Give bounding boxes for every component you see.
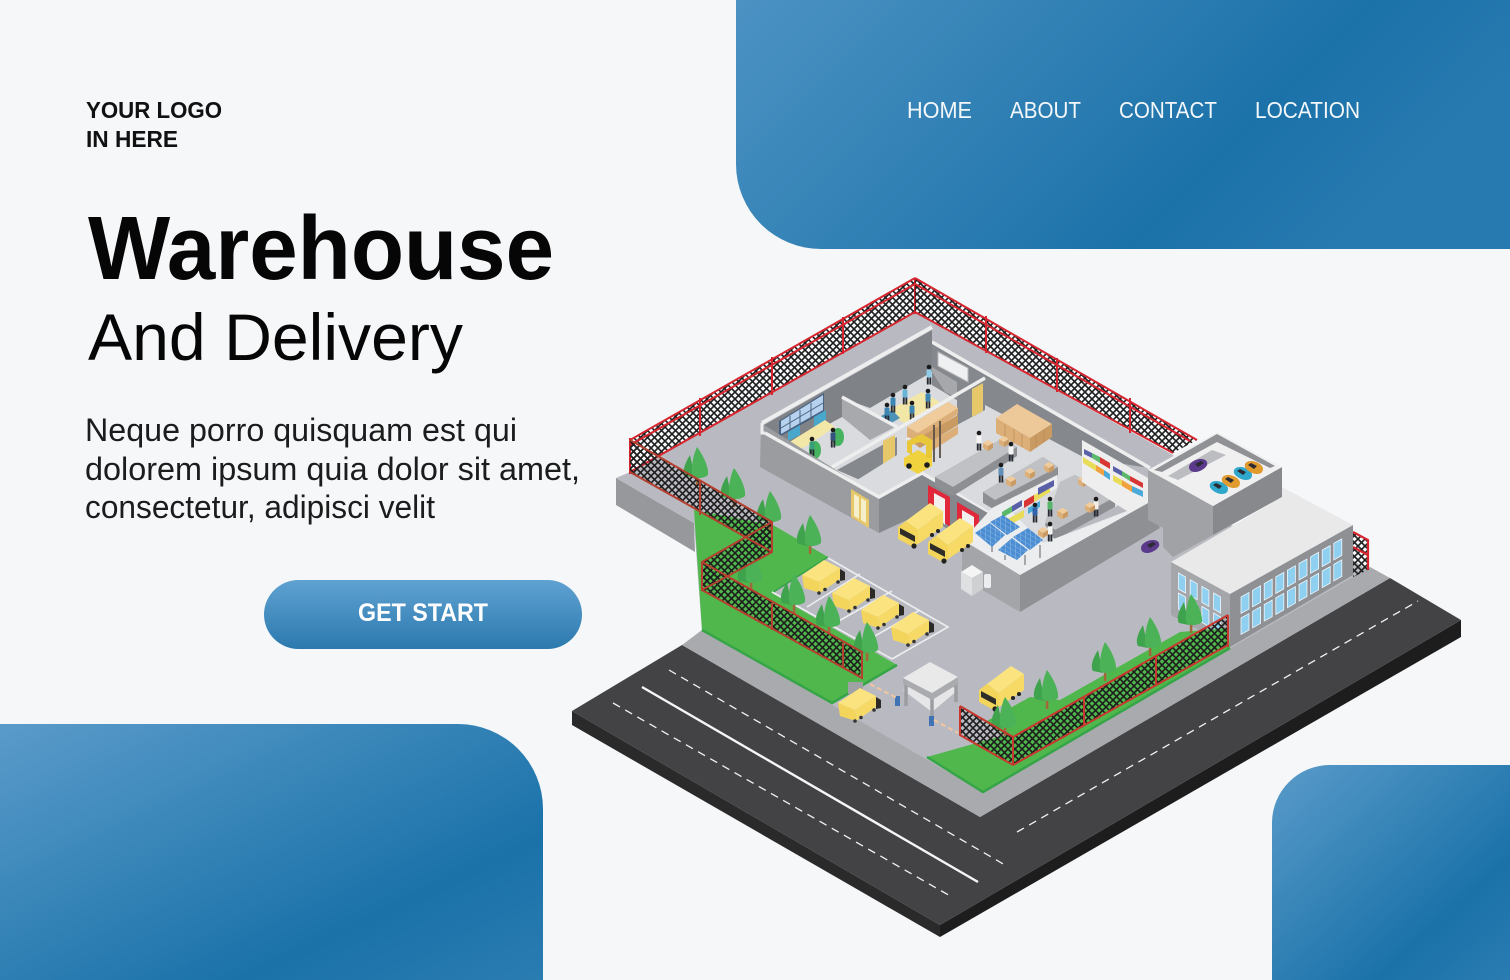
- room divider wall: [842, 397, 897, 440]
- shelf panel back right: [1082, 440, 1148, 513]
- navigation menu: [907, 97, 1360, 123]
- body paragraph: Neque porro quisquam est qui: [85, 412, 517, 448]
- office building: [1171, 487, 1353, 647]
- navigation menu: CONTACT: [1119, 97, 1217, 123]
- office back wall: [762, 327, 932, 445]
- solar panels: [975, 515, 1043, 565]
- hall floor: [857, 455, 922, 497]
- back right wall: [932, 342, 1150, 468]
- fence: back left: [630, 278, 915, 474]
- control room monitors: [779, 393, 835, 450]
- ledge and lot surface: [616, 312, 1390, 817]
- body paragraph: consectetur, adipisci velit: [85, 489, 435, 525]
- title: And Delivery: [88, 300, 463, 374]
- navigation menu: LOCATION: [1255, 97, 1360, 123]
- logo text: YOUR LOGO: [86, 97, 222, 123]
- office door cream: [851, 489, 869, 528]
- grass bank left: [694, 510, 897, 703]
- van at gate: [838, 688, 881, 723]
- air conditioning units: [961, 565, 991, 596]
- yellow trucks at dock: [898, 503, 973, 564]
- gate canopy: [903, 662, 958, 720]
- front walls of lower block: [962, 503, 1160, 612]
- purple car: [1141, 540, 1159, 553]
- logo text: IN HERE: [86, 126, 178, 152]
- meeting table and staff: [881, 385, 940, 425]
- forklift: [904, 421, 940, 474]
- stacked cartons: [996, 404, 1052, 452]
- whiteboard and presenter: [926, 352, 968, 384]
- grass bank right: [927, 628, 1230, 792]
- fence: far right behind building: [1353, 532, 1368, 577]
- white deck with shelves: [963, 475, 1148, 575]
- office front wall: [760, 423, 1000, 533]
- title: Warehouse: [88, 199, 554, 299]
- trees upper row: [684, 447, 821, 554]
- parking block: [1148, 432, 1282, 557]
- navigation menu: ABOUT: [1010, 97, 1081, 123]
- building windows: [1178, 539, 1342, 634]
- title: [88, 199, 554, 374]
- long corridor wall: [832, 378, 985, 480]
- logo text: [86, 97, 222, 152]
- panel: top right blue shape: [736, 0, 1510, 249]
- truck in yard: [979, 666, 1024, 712]
- trees right row: [992, 594, 1202, 736]
- navigation menu: HOME: [907, 97, 972, 123]
- warehouse main floors: [764, 330, 1148, 548]
- workers at packing station: [1032, 497, 1068, 542]
- trees lower row: [738, 552, 878, 661]
- fence: left side over grass: [630, 440, 862, 678]
- panel: bottom right blue shape: [1272, 765, 1510, 980]
- button: get start: [264, 580, 582, 649]
- parked delivery vans: [802, 560, 934, 647]
- parking bay lines: [772, 558, 948, 659]
- control room staff: [809, 428, 844, 459]
- conveyor belts: [935, 438, 1115, 540]
- body paragraph: [85, 412, 580, 525]
- red dock doors: [928, 485, 979, 535]
- warehouse workers and parcels: [976, 431, 1098, 519]
- loading dock wall: [922, 475, 1000, 560]
- button: get start: GET START: [358, 599, 488, 627]
- gate barriers: [848, 682, 958, 733]
- fence: back right: [915, 278, 1197, 453]
- illustration: isometric warehouse: [572, 278, 1461, 937]
- pallet shelves: [905, 402, 958, 452]
- body paragraph: dolorem ipsum quia dolor sit amet,: [85, 451, 580, 487]
- panel: bottom left blue shape: [0, 724, 543, 980]
- fence: front right: [960, 615, 1228, 765]
- road slab: [572, 578, 1461, 937]
